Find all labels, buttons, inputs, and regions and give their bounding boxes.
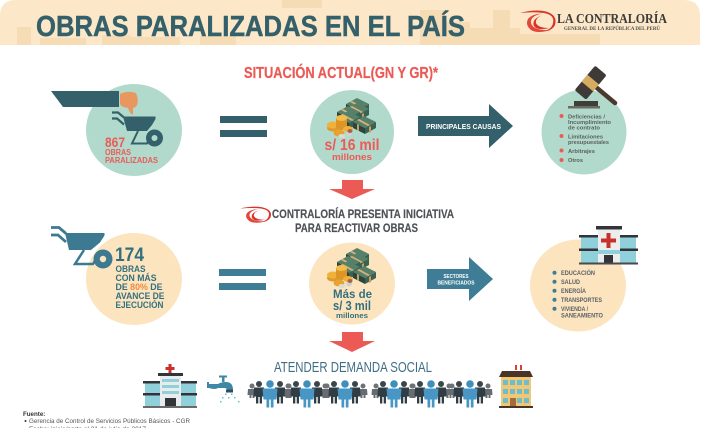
panel: causes bbox=[542, 66, 626, 174]
equals sign bbox=[219, 269, 266, 290]
list: causes bbox=[560, 114, 612, 164]
heading: situación actual: SITUACIÓN ACTUAL(GN Y GR)* bbox=[244, 63, 439, 82]
source note: Fuente: bbox=[23, 411, 45, 418]
icon: small logo bbox=[240, 207, 271, 223]
icon: gavel bbox=[568, 66, 615, 108]
text: amount bbox=[324, 137, 380, 163]
list: causes: Arbitrajes bbox=[568, 149, 595, 155]
arrow: sectores beneficiados bbox=[427, 257, 493, 301]
text: amount: s/ 16 mil bbox=[324, 137, 380, 154]
text: 867 obras paralizadas: OBRAS bbox=[105, 148, 131, 157]
text: 867 obras paralizadas: 867 bbox=[105, 135, 125, 150]
list: sectors: SALUD bbox=[561, 280, 581, 286]
list: causes: de contrato bbox=[568, 126, 601, 132]
icon: wheelbarrow bbox=[112, 112, 163, 146]
header banner bbox=[0, 0, 700, 45]
list: sectors: TRANSPORTES bbox=[561, 298, 602, 304]
list: sectors: ENERGÍA bbox=[561, 287, 587, 295]
list: causes: Incumplimiento bbox=[568, 120, 612, 126]
text: 174 obras: AVANCE DE bbox=[116, 291, 165, 302]
logo: La Contraloría: LA CONTRALORÍA bbox=[557, 10, 668, 27]
heading: initiative: PARA REACTIVAR OBRAS bbox=[295, 221, 418, 235]
list: sectors: SANEAMIENTO bbox=[561, 314, 603, 320]
text: 867 obras paralizadas: PARALIZADAS bbox=[105, 156, 158, 165]
list: causes: Limitaciones bbox=[568, 134, 603, 140]
arrow: down to initiative bbox=[329, 180, 375, 199]
arrow: sectores beneficiados: SECTORES bbox=[444, 274, 469, 280]
text: 174 obras: CON MÁS bbox=[116, 272, 157, 284]
arrow: sectores beneficiados: BENEFICIADOS bbox=[438, 280, 475, 286]
list: causes: Deficiencias / bbox=[568, 114, 606, 120]
text: 174 obras bbox=[115, 245, 165, 311]
heading: initiative: CONTRALORÍA PRESENTA INICIATIVA bbox=[272, 206, 454, 221]
panel: sectors bbox=[530, 226, 638, 332]
icon: water tap bbox=[207, 376, 240, 402]
source note: Gerencia de Control de Servicios Públicos Básicos - CGR bbox=[29, 419, 191, 425]
text: amount: millones bbox=[332, 152, 372, 163]
heading: initiative bbox=[272, 206, 454, 235]
list: sectors bbox=[552, 269, 603, 320]
text: amount: Más de bbox=[333, 287, 372, 301]
title: OBRAS PARALIZADAS EN EL PAÍS bbox=[36, 9, 465, 43]
text: amount: s/ 3 mil bbox=[333, 299, 371, 313]
text: 174 obras: DE 80% DE bbox=[116, 282, 163, 293]
panel: 3 mil millones bbox=[309, 242, 395, 324]
arrow: down to social demand bbox=[329, 332, 375, 352]
list: sectors: VIVIENDA / bbox=[561, 307, 588, 313]
list: causes: presupuestales bbox=[568, 140, 609, 146]
text: 174 obras: EJECUCIÓN bbox=[116, 299, 164, 311]
list: causes: Otros bbox=[568, 158, 583, 164]
icon: blue wheelbarrow bbox=[51, 228, 112, 268]
icon: hospital small bbox=[143, 364, 197, 408]
arrow: principales causas: PRINCIPALES CAUSAS bbox=[426, 124, 501, 131]
icon: money bbox=[327, 248, 376, 288]
panel: 867 obras paralizadas bbox=[51, 84, 182, 176]
text: amount bbox=[333, 287, 372, 320]
text: 174 obras: 174 bbox=[115, 245, 144, 266]
icon: crowd of people bbox=[248, 380, 492, 408]
icon: arm with thumb down bbox=[51, 91, 138, 115]
icon: hospital bbox=[579, 226, 638, 264]
panel: 174 obras bbox=[51, 228, 182, 325]
equals sign bbox=[220, 116, 267, 137]
heading: atender demanda social: ATENDER DEMANDA SOCIAL bbox=[274, 359, 432, 376]
icon: money bbox=[327, 98, 376, 138]
panel: 16 mil millones bbox=[310, 90, 394, 174]
text: amount: millones bbox=[336, 313, 368, 320]
text: 867 obras paralizadas bbox=[105, 135, 158, 165]
logo: La Contraloría: GENERAL DE LA REPÚBLICA DEL PERÚ bbox=[564, 24, 660, 32]
list: sectors: EDUCACIÓN bbox=[561, 269, 595, 277]
text: 174 obras: OBRAS bbox=[116, 264, 146, 275]
icon: government building bbox=[499, 365, 533, 408]
source note bbox=[23, 411, 191, 428]
logo: La Contraloría bbox=[520, 10, 668, 32]
arrow: principales causas bbox=[418, 104, 513, 148]
